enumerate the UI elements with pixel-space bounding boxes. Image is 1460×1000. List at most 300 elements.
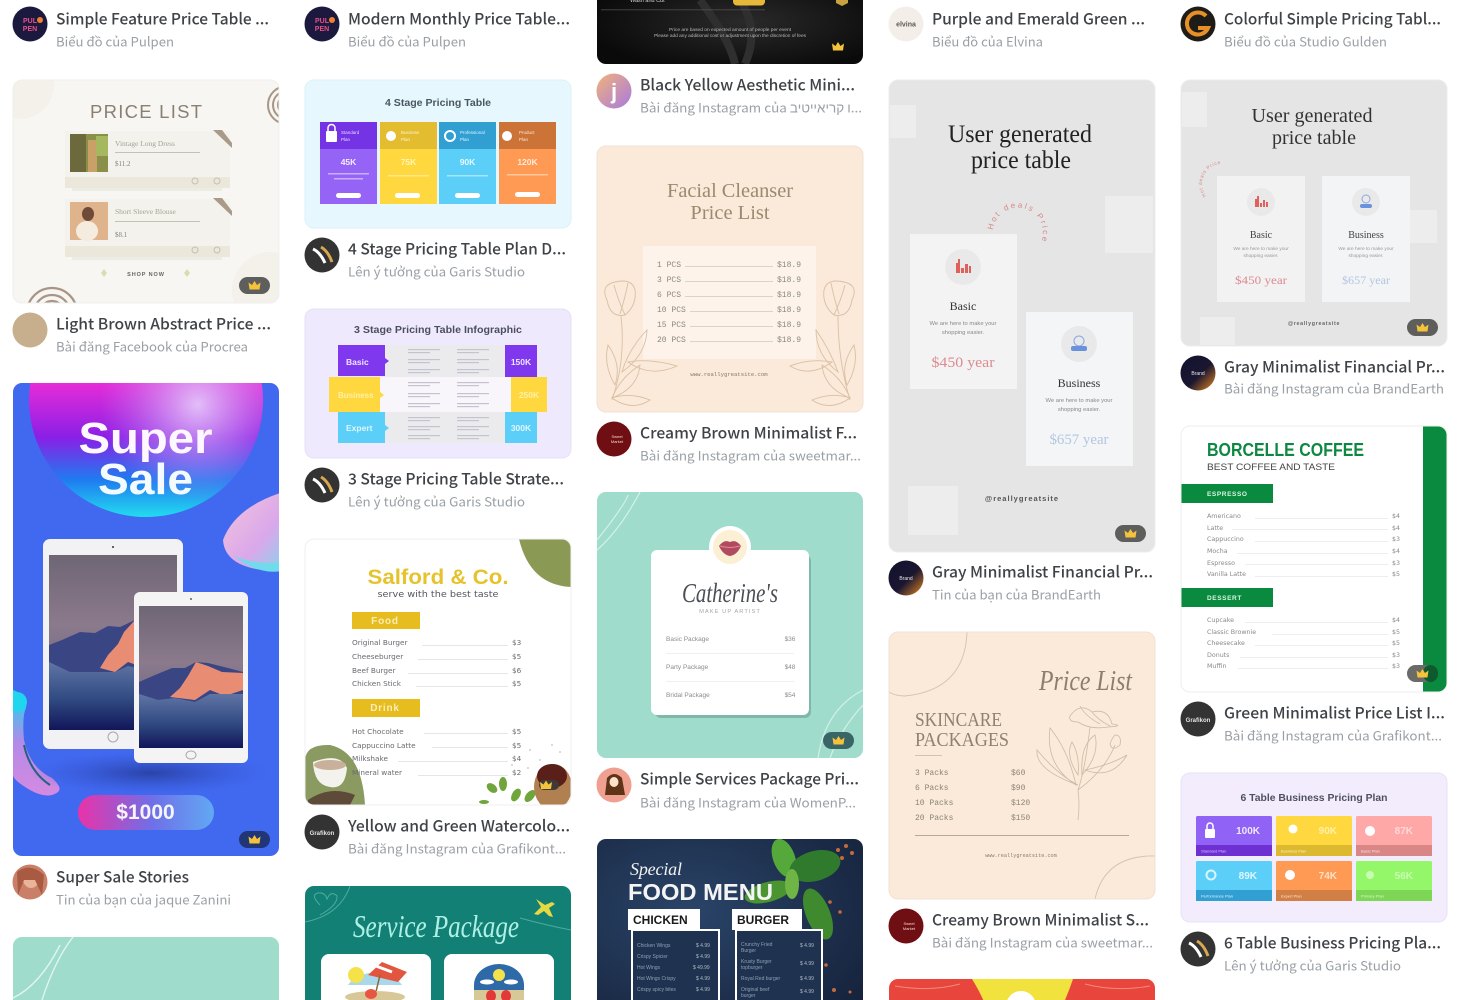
chicken menu: Hot Wings Crispy <box>637 976 676 982</box>
food dividers <box>398 645 508 776</box>
card: Catherine's make up artist <box>597 492 863 758</box>
subtitle: Bài đăng Instagram của sweetmar... <box>932 932 1153 952</box>
caption: Creamy Brown Minimalist S <box>888 908 1153 952</box>
tab: drink <box>352 699 420 717</box>
card outline <box>1181 426 1447 692</box>
espresso rows: Americano <box>1207 513 1241 520</box>
card outline <box>13 80 279 303</box>
avatar: sweetmar: Sweet <box>903 921 915 926</box>
column: professional: Plan <box>460 137 470 142</box>
subtitle: Lên ý tưởng của Garis Studio <box>348 492 525 510</box>
item two <box>65 198 232 260</box>
price rows: $18.9 <box>777 336 801 345</box>
arcs bottom left <box>28 286 76 302</box>
plan: business: We are here to make your <box>1046 398 1113 404</box>
burger menu: $ 4.99 <box>800 989 814 995</box>
avatar: Grafikont: Grafikon <box>310 831 335 837</box>
title: Creamy Brown Minimalist F... <box>640 422 857 444</box>
card: Skincare packages: PACKAGES <box>915 730 1009 751</box>
plan: business: Business Plan <box>1281 848 1306 854</box>
subtitle: Tin của bạn của BrandEarth <box>932 584 1101 604</box>
price rows: 6 Packs <box>915 784 949 793</box>
script heading: Price List <box>1038 665 1133 697</box>
item one: $11.2 <box>115 160 131 168</box>
plan: basic: Basic <box>1250 230 1273 241</box>
dessert rows: $4 <box>1392 617 1400 624</box>
avatar: Pulpen: PEN <box>315 26 329 33</box>
avatar <box>12 312 48 348</box>
price rows: 3 Packs <box>915 769 949 778</box>
green side bar <box>1423 426 1447 692</box>
caption: Green Minimalist Price List <box>1180 702 1445 744</box>
tab: food: Food <box>371 616 399 627</box>
plan: basic: $450 year <box>932 355 995 371</box>
chicken menu: Hot Wings <box>637 965 661 971</box>
burger menu: BURGER <box>737 913 789 927</box>
right blob <box>223 493 279 572</box>
caption: 6 Table Business Pricing <box>1180 932 1441 974</box>
espresso rows: Mocha <box>1207 548 1228 555</box>
food rows: $6 <box>512 666 522 675</box>
card: 4 stage pricing table <box>305 80 571 228</box>
price rows: 6 PCS <box>657 291 681 300</box>
column: product: Plan <box>519 137 529 142</box>
price rows: $150 <box>1011 814 1030 823</box>
subtitle: Bài đăng Instagram của קריאייטיב‎ ו‎... <box>640 98 862 116</box>
drink rows: $2 <box>512 768 521 777</box>
avatar: Grafikont: Grafikon <box>1186 718 1211 724</box>
drink rows: $5 <box>512 741 521 750</box>
chicken menu: CHICKEN <box>633 913 688 927</box>
subtitle: Bài đăng Facebook của Procrea <box>56 336 248 356</box>
plan: business: $657 year <box>1342 273 1390 287</box>
heading: Service Package <box>353 908 519 944</box>
espresso rows: $3 <box>1392 560 1400 567</box>
chicken menu: Crispy spicy bites <box>637 987 676 993</box>
heading: User generated <box>948 121 1092 148</box>
chicken menu <box>628 909 719 1000</box>
caption: Purple and Emerald Green <box>888 6 1145 50</box>
package rows: $36 <box>785 636 796 643</box>
burger menu: burger <box>741 993 756 999</box>
card: Borcelle Coffee <box>1181 426 1447 692</box>
tablet shadow <box>40 756 244 790</box>
card: 3 stage pricing infographic <box>305 309 571 458</box>
espresso rows: $4 <box>1392 525 1400 532</box>
card: User generated price table portrait <box>888 80 1156 552</box>
avatar: Garis <box>1180 932 1216 966</box>
caption: Gray Minimalist Financial 2 <box>1180 356 1445 398</box>
burger menu: $ 4.99 <box>800 976 814 982</box>
title: 3 Stage Pricing Table Strate... <box>348 468 564 490</box>
plane icon <box>534 899 555 917</box>
food rows: Original Burger <box>352 638 408 647</box>
caption: Super Sale Stories <box>12 864 231 908</box>
plan: business: shopping easier. <box>1349 253 1383 259</box>
plan: performance <box>1196 861 1272 901</box>
column: product: Product <box>519 130 535 135</box>
plan: business <box>1276 816 1352 856</box>
price: 150K: 150K <box>511 357 532 367</box>
plan: basic <box>1217 176 1305 302</box>
avatar: j <box>596 74 632 108</box>
burger menu: Crunchy Fried <box>741 942 773 948</box>
curved text: Hot deals Price <box>988 203 1048 241</box>
plan: standard: 100K <box>1236 826 1261 837</box>
flower right <box>790 281 855 406</box>
drink rows <box>352 727 522 777</box>
package rows: Basic Package <box>666 636 709 643</box>
column: standard: Standard <box>341 130 360 135</box>
tier: business <box>329 377 384 412</box>
card outline <box>889 632 1155 899</box>
column: product: 120K <box>517 157 539 167</box>
premium badge <box>1407 665 1438 682</box>
price rows: 1 PCS <box>657 261 681 270</box>
corner curves <box>889 632 1155 899</box>
heading: BORCELLE COFFEE <box>1207 440 1364 460</box>
plan: expert: Expert Plan <box>1281 894 1302 898</box>
price: 300K <box>505 412 537 443</box>
shop now: SHOP NOW <box>127 272 165 278</box>
title: Gray Minimalist Financial Pr... <box>932 560 1153 582</box>
chicken menu: $ 4.99 <box>696 976 710 982</box>
espresso rows: $4 <box>1392 513 1400 520</box>
heading: FOOD MENU <box>628 879 773 905</box>
dessert rows: Classic Brownie <box>1207 629 1256 636</box>
drink rows: $5 <box>512 727 521 736</box>
flower line art <box>1037 706 1127 820</box>
chicken menu: $ 4.99 <box>696 954 710 960</box>
avatar: sweetmar <box>596 422 632 456</box>
card: User generated price table square: price table <box>1272 127 1356 149</box>
burger menu: $ 4.99 <box>800 961 814 967</box>
crown <box>832 42 844 50</box>
caption: Creamy Brown Minimalist F <box>596 422 861 464</box>
package card one <box>321 954 431 1000</box>
avatar: Pulpen <box>304 6 340 42</box>
tab: dessert: DESSERT <box>1207 595 1242 602</box>
handle: @reallygreatsite <box>985 494 1059 503</box>
leaf top right <box>519 539 571 587</box>
plan: expert <box>1276 861 1352 901</box>
drink rows: Hot Chocolate <box>352 727 404 736</box>
avatar: Grafikont <box>1180 702 1216 736</box>
package rows: Bridal Package <box>666 692 710 699</box>
row lines <box>1232 518 1388 669</box>
food rows: Chicken Stick <box>352 679 402 688</box>
premium badge <box>239 277 270 294</box>
plan: basic: shopping easier. <box>1244 253 1278 259</box>
drink rows: Mineral water <box>352 768 402 777</box>
drink rows: $4 <box>512 754 522 763</box>
tagline: serve with the best taste <box>378 590 499 600</box>
burger menu: $ 4.99 <box>800 943 814 949</box>
plan: performance: 89K <box>1239 871 1258 882</box>
column: product <box>499 122 556 204</box>
card: User generated price table square <box>1180 80 1448 346</box>
tab: food <box>352 612 420 629</box>
plan: expert: 74K <box>1319 871 1338 882</box>
package rows: $48 <box>785 664 796 671</box>
caption: Simple Services Package <box>596 768 859 812</box>
subtitle: Tin của bạn của jaque Zanini <box>56 890 231 908</box>
heading: Super <box>78 414 212 463</box>
avatar: sweetmar <box>888 908 924 944</box>
subtitle: Biểu đồ của Pulpen <box>348 32 466 50</box>
dessert rows: Cheesecake <box>1207 640 1245 647</box>
espresso rows: Cappuccino <box>1207 536 1244 543</box>
column: business: Plan <box>401 137 411 142</box>
card: Service Package <box>305 886 571 1000</box>
white panel <box>651 550 811 718</box>
caption: Gray Minimalist Financial <box>888 560 1153 604</box>
caption: Colorful Simple Pricing <box>1180 6 1441 50</box>
caption: 4 Stage Pricing Table Plan <box>304 238 566 280</box>
burger menu <box>732 909 822 1000</box>
espresso rows: $4 <box>1392 548 1400 555</box>
caption: Black Yellow Aesthetic <box>596 74 862 116</box>
card: Facial Cleanser price list: Price List <box>690 202 770 224</box>
plan: primary: Primary Plan <box>1361 894 1384 898</box>
item one: Vintage Long Dress <box>115 139 175 148</box>
espresso rows: Latte <box>1207 525 1223 532</box>
espresso rows: $5 <box>1392 571 1400 578</box>
price rows: $90 <box>1011 784 1026 793</box>
dessert rows <box>1207 617 1400 670</box>
plan: business <box>1322 176 1410 302</box>
heading: Facial Cleanser <box>667 180 793 202</box>
plan: standard: Standard Plan <box>1201 848 1226 854</box>
basil leaves <box>742 835 844 944</box>
tier: basic: Basic <box>346 357 369 367</box>
price rows: 20 PCS <box>657 336 686 345</box>
price pill <box>78 795 214 830</box>
heading: 3 Stage Pricing Table Infographic <box>354 324 522 336</box>
item two: $8.1 <box>115 231 128 239</box>
soft squares <box>1182 92 1437 345</box>
plan: business: shopping easier. <box>1058 407 1100 413</box>
title: 6 Table Business Pricing Pla... <box>1224 932 1441 954</box>
heading: Salford & Co. <box>368 565 508 589</box>
speckles <box>511 744 561 769</box>
card: Super Sale <box>13 383 279 856</box>
feature lines <box>408 349 489 439</box>
card outline <box>305 539 571 805</box>
subtitle: Bài đăng Instagram của BrandEarth <box>1224 378 1444 398</box>
center rows <box>385 345 505 377</box>
title: Modern Monthly Price Table... <box>348 8 570 30</box>
title: Black Yellow Aesthetic Mini... <box>640 74 855 96</box>
decorative curves <box>597 492 863 758</box>
price rows: 3 PCS <box>657 276 681 285</box>
package rows: Party Package <box>666 664 709 671</box>
card: Black Yellow price list: Please add any additional cost or adjustment upon the discretion of fees <box>654 33 807 38</box>
avatar: sweetmar: Sweet <box>611 434 623 439</box>
avatar: BrandEarth: Brand <box>1191 371 1205 377</box>
title: 4 Stage Pricing Table Plan D... <box>348 238 566 260</box>
burger menu: Royal Red burger <box>741 976 781 982</box>
food rows <box>352 638 522 688</box>
small tablet <box>134 592 248 763</box>
dessert rows: $5 <box>1392 629 1400 636</box>
espresso rows <box>1207 513 1400 578</box>
dessert rows: $5 <box>1392 640 1400 647</box>
food rows: $5 <box>512 652 521 661</box>
premium badge <box>1115 525 1146 542</box>
caption: Light Brown Abstract Price <box>12 312 271 356</box>
tab: drink: Drink <box>370 703 400 714</box>
card: teal partial <box>13 937 279 1000</box>
price rows: 15 PCS <box>657 321 686 330</box>
row dividers <box>666 653 794 682</box>
dessert rows: Donuts <box>1207 652 1229 659</box>
plan: business: Business <box>1058 376 1101 390</box>
card: Black Yellow price list <box>597 0 863 64</box>
dessert rows: Cupcake <box>1207 617 1234 624</box>
website: www.reallygreatsite.com <box>690 371 768 378</box>
subtitle: Biểu đồ của Pulpen <box>56 32 174 50</box>
brand name: Catherine's <box>682 578 778 608</box>
row lines <box>685 266 773 342</box>
card: Light Brown price list <box>14 80 278 302</box>
title: Creamy Brown Minimalist S... <box>932 908 1149 930</box>
subtitle: Biểu đồ của Studio Gulden <box>1224 32 1387 50</box>
subtitle: Bài đăng Instagram của WomenP... <box>640 792 856 812</box>
card: Special Food Menu <box>597 835 863 1000</box>
price rows: 20 Packs <box>915 814 954 823</box>
leaves bottom right <box>479 777 538 804</box>
lips badge <box>709 526 751 568</box>
price rows: $120 <box>1011 799 1030 808</box>
tagline: BEST COFFEE AND TASTE <box>1207 462 1335 473</box>
price rows: $18.9 <box>777 321 801 330</box>
tier: expert: Expert <box>346 423 373 433</box>
chicken menu: Crispy Spicier <box>637 954 668 960</box>
plan: basic <box>910 234 1017 389</box>
food rows: Beef Burger <box>352 666 396 675</box>
burger menu: Krusty Burger <box>741 959 772 965</box>
card: Facial Cleanser price list <box>597 146 863 412</box>
avatar: Elvina: elvina <box>896 22 916 28</box>
avatar: Garis <box>304 238 340 272</box>
avatar <box>12 864 48 900</box>
plan: basic: 87K <box>1395 826 1414 837</box>
price: 150K <box>505 345 537 377</box>
price rows: 10 Packs <box>915 799 954 808</box>
plan: basic: Basic Plan <box>1361 848 1380 854</box>
title: Gray Minimalist Financial Pr... <box>1224 356 1445 378</box>
chicken menu: $ 4.99 <box>696 987 710 993</box>
card outline <box>597 146 863 412</box>
caption: Modern Monthly Price Table <box>304 6 570 50</box>
chicken menu: $ 4.99 <box>696 943 710 949</box>
dessert rows: $3 <box>1392 652 1400 659</box>
avatar: Studio Gulden <box>1180 6 1216 42</box>
plan: business: $657 year <box>1050 432 1109 448</box>
plan: basic: shopping easier. <box>942 330 984 336</box>
burger menu: Burger <box>741 948 756 954</box>
tier: expert <box>338 412 389 443</box>
arcs top right <box>267 87 278 123</box>
package card two <box>444 954 554 1000</box>
premium badge <box>1407 319 1438 336</box>
plan: basic: We are here to make your <box>930 321 997 327</box>
title: Super Sale Stories <box>56 866 189 888</box>
column: business: 75K <box>401 157 417 167</box>
burger menu: Original beef <box>741 987 770 993</box>
price rows: $18.9 <box>777 261 801 270</box>
plan: basic <box>1356 816 1432 856</box>
plan: basic: Basic <box>950 299 976 313</box>
tier: basic <box>338 345 389 376</box>
caption: Simple Feature Price Table <box>12 6 269 50</box>
title: Green Minimalist Price List I... <box>1224 702 1445 724</box>
subtitle: Bài đăng Instagram của Grafikont... <box>348 838 566 858</box>
premium badge <box>239 831 270 848</box>
card: Super Sale: Sale <box>98 455 193 504</box>
avatar: sweetmar: Market <box>903 926 916 931</box>
plan: primary: 56K <box>1395 871 1414 882</box>
left swirl <box>13 690 60 796</box>
chicken menu: $ 49.99 <box>693 965 710 971</box>
column: professional: Professional <box>460 130 485 135</box>
tier: business: Business <box>338 391 374 400</box>
tab: espresso <box>1181 484 1273 503</box>
burger menu: topburger <box>741 965 763 971</box>
dessert rows: $3 <box>1392 663 1400 670</box>
plan: basic: We are here to make your <box>1233 246 1289 252</box>
column: professional <box>439 122 496 204</box>
plan: business: We are here to make your <box>1338 246 1394 252</box>
price: 250K <box>511 377 547 412</box>
food bowl <box>534 764 570 804</box>
avatar: Garis <box>304 468 340 502</box>
plan: business: 90K <box>1319 826 1338 837</box>
avatar: Pulpen <box>12 6 48 42</box>
spices <box>824 844 854 994</box>
price: 300K: 300K <box>511 423 532 433</box>
title: Purple and Emerald Green ... <box>932 8 1145 30</box>
title: Simple Services Package Pri... <box>640 768 859 790</box>
gradient orb <box>29 383 263 517</box>
title: Yellow and Green Watercolo... <box>347 814 570 836</box>
food rows: Cheeseburger <box>352 652 403 661</box>
avatar: Pulpen: PEN <box>23 26 37 33</box>
avatar: sweetmar: Market <box>611 439 624 444</box>
subheading: Special <box>630 859 682 879</box>
price pill: $1000 <box>116 801 175 824</box>
avatar: Grafikont <box>304 814 340 850</box>
title: Simple Feature Price Table ... <box>56 8 269 30</box>
caption: Yellow and Green Watercolor <box>304 814 570 858</box>
drink rows: Milkshake <box>352 754 388 763</box>
package rows: $54 <box>785 692 796 699</box>
subtitle: Biểu đồ của Elvina <box>932 32 1043 50</box>
avatar: BrandEarth: Brand <box>899 576 913 582</box>
rule <box>915 835 1129 836</box>
espresso rows: Vanilla Latte <box>1207 571 1246 578</box>
column: business <box>380 122 437 204</box>
handle: @reallygreatsite <box>1288 321 1340 327</box>
plan: basic: $450 year <box>1235 273 1287 287</box>
subtitle: Bài đăng Instagram của Grafikont... <box>1224 726 1442 744</box>
price panel <box>643 246 816 359</box>
item one <box>65 130 232 191</box>
column: standard: 45K <box>341 157 357 167</box>
price rows <box>657 261 801 345</box>
note: Price are based on expected amount of people per event <box>669 27 792 32</box>
